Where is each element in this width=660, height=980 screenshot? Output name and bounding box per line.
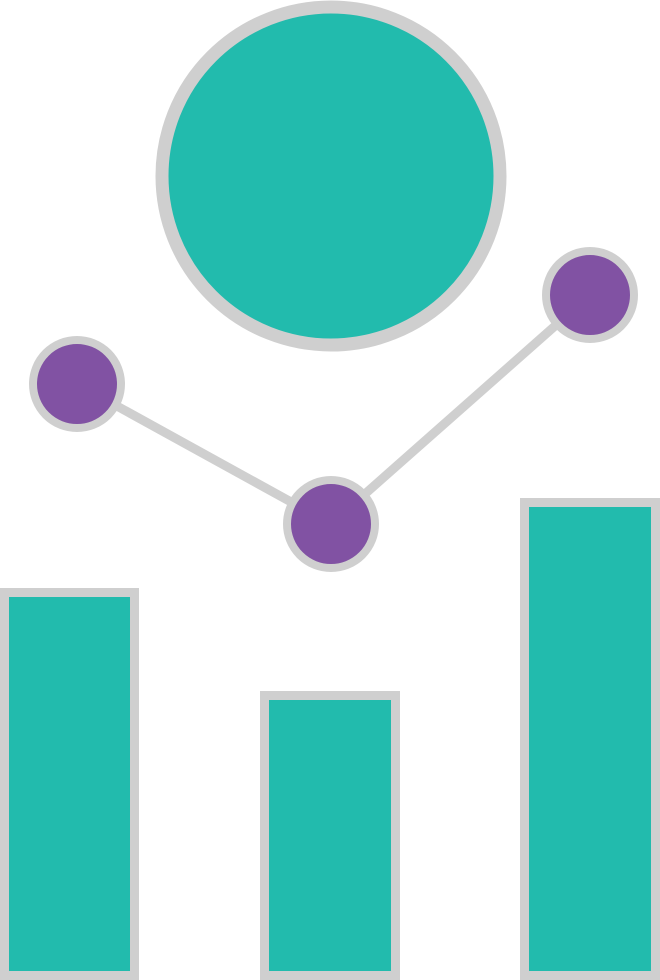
- line chart point: middle: [287, 480, 375, 568]
- bar: left: [4, 592, 134, 976]
- big circle: [162, 7, 500, 345]
- line chart point: left: [33, 340, 121, 428]
- line chart connectors: [77, 295, 590, 524]
- bar: right: [524, 502, 656, 976]
- bar: middle: [264, 696, 396, 976]
- line chart point: right: [546, 251, 634, 339]
- bar chart: [4, 502, 656, 976]
